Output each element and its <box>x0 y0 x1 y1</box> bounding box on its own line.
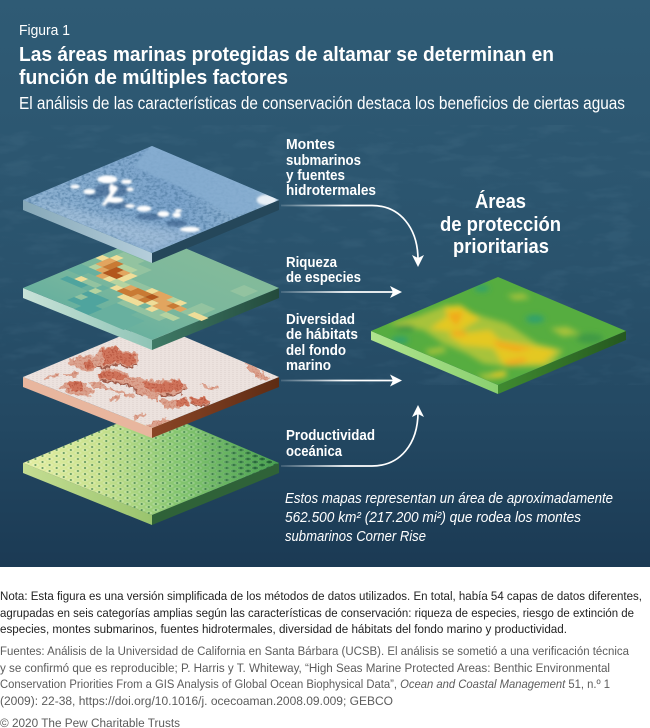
layer: priority protection areas map <box>371 277 626 394</box>
arrow: seamounts to priority areas <box>281 206 424 267</box>
layer: species richness map <box>23 234 279 350</box>
heading: figure number: Figura 1 <box>19 23 70 39</box>
heat cells <box>25 240 265 342</box>
label: seabed habitat diversity: Diversidad <box>286 312 355 328</box>
label: seamounts: hidrotermales <box>286 183 376 199</box>
arrow: species richness <box>281 286 402 298</box>
label: seamounts: y fuentes <box>286 168 345 184</box>
text block: map area note: Estos mapas representan un área de aproximadamente <box>285 491 613 507</box>
title: Las áreas marinas protegidas de altamar se determinan en <box>19 43 554 66</box>
layer: ocean productivity map <box>23 409 279 525</box>
heading: priority protection areas <box>440 190 561 258</box>
habitat clusters <box>45 345 270 428</box>
text block: sources: y se confirmó que es reproducible; P. Harris y T. Whiteway, “High Seas Marine Protected Areas: Benthic Environmental <box>0 661 610 675</box>
text block: note <box>0 589 642 636</box>
text block: map area note <box>285 491 613 545</box>
label: seamounts <box>286 137 376 199</box>
text block: map area note: submarinos Corner Rise <box>285 529 426 545</box>
label: seabed habitat diversity: del fondo <box>286 343 346 359</box>
label: seabed habitat diversity: marino <box>286 358 331 374</box>
label: seabed habitat diversity: de hábitats <box>286 327 358 343</box>
label: seamounts: submarinos <box>286 153 361 169</box>
heading: priority protection areas: prioritarias <box>453 236 549 258</box>
label: ocean productivity: Productividad <box>286 428 375 444</box>
layer: seamounts and hydrothermal vents map <box>20 143 283 263</box>
arrow: ocean productivity <box>281 405 424 466</box>
relief texture <box>20 143 283 256</box>
text block: note: especies, montes submarinos, fuentes hidrotermales, diversidad de hábitats del fondo marino y productividad. <box>0 622 567 636</box>
blurred priority heatmap <box>387 285 603 380</box>
label: species richness <box>286 255 361 286</box>
label: species richness: de especies <box>286 270 361 286</box>
label: seabed habitat diversity <box>286 312 358 374</box>
text block: sources <box>0 644 629 708</box>
text block: sources: Conservation Priorities From a GIS Analysis of Global Ocean Biophysical Data”, Ocean and Coastal Management 51, n.º 1 <box>0 677 610 691</box>
text block: sources: (2009): 22-38, https://doi.org/10.1016/j. ocecoaman.2008.09.009; GEBCO <box>0 694 393 708</box>
heading: priority protection areas: de protección <box>440 214 561 236</box>
heading: priority protection areas: Áreas <box>475 190 526 213</box>
label: seamounts: Montes <box>286 137 335 153</box>
layer: seabed habitat diversity map <box>23 323 279 438</box>
arrow: seabed habitat diversity <box>281 374 402 386</box>
text block: map area note: 562.500 km² (217.200 mi²) que rodea los montes <box>285 510 581 526</box>
title: función de múltiples factores <box>19 66 288 89</box>
label: ocean productivity <box>286 428 375 460</box>
panel: ocean background <box>0 0 650 567</box>
label: species richness: Riqueza <box>286 255 338 271</box>
label: ocean productivity: oceánica <box>286 444 343 460</box>
